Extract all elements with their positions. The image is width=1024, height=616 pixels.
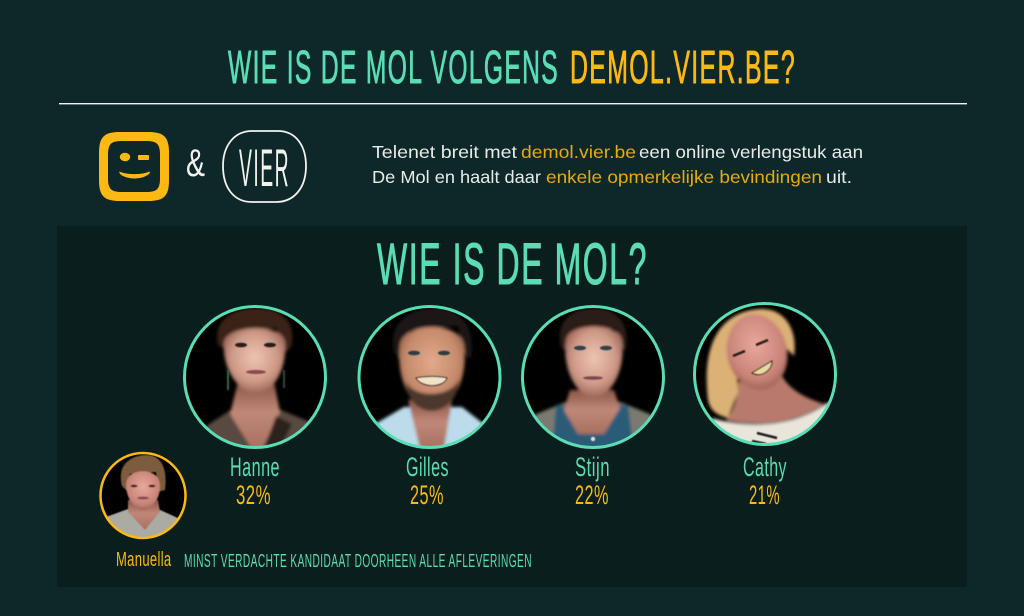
intro text: De Mol en haalt daar xyxy=(372,167,541,187)
portrait: Cathy xyxy=(694,303,842,450)
label: Hanne xyxy=(230,452,280,510)
title: WIE IS DE MOL VOLGENS xyxy=(228,41,559,93)
intro text: Telenet breit met xyxy=(372,142,517,162)
panel heading: WIE IS DE MOL? xyxy=(377,232,648,297)
label: Cathy: Cathy xyxy=(743,452,787,482)
portrait: Gilles xyxy=(358,306,500,452)
label: Stijn xyxy=(575,452,610,510)
caption: MINST VERDACHTE KANDIDAAT DOORHEEN ALLE AFLEVERINGEN xyxy=(184,551,532,571)
label: Hanne: 32% xyxy=(236,480,271,510)
label: Cathy: 21% xyxy=(749,480,780,510)
panel: wie is de mol xyxy=(57,226,967,587)
portrait: Stijn xyxy=(522,306,664,452)
label: Gilles: Gilles xyxy=(406,452,449,482)
label: Cathy xyxy=(743,452,787,510)
label: Stijn: Stijn xyxy=(575,452,610,482)
label: Hanne: Hanne xyxy=(230,452,280,482)
portrait: Hanne xyxy=(184,306,326,450)
intro text: uit. xyxy=(826,167,852,187)
label: Gilles: 25% xyxy=(410,480,444,510)
intro text: demol.vier.be xyxy=(521,142,636,162)
label: Manuella: Manuella xyxy=(116,549,172,571)
ampersand: & xyxy=(186,142,205,185)
label: Stijn: 22% xyxy=(575,480,609,510)
text: VIER xyxy=(239,139,290,198)
icon: VIER logo xyxy=(223,131,306,202)
title: DEMOL.VIER.BE? xyxy=(570,41,796,93)
intro text: een online verlengstuk aan xyxy=(639,142,863,162)
label: Gilles xyxy=(406,452,449,510)
intro text xyxy=(372,142,863,187)
portrait: Manuella xyxy=(100,452,186,542)
intro text: enkele opmerkelijke bevindingen xyxy=(546,167,822,187)
icon: Telenet logo xyxy=(99,132,169,201)
